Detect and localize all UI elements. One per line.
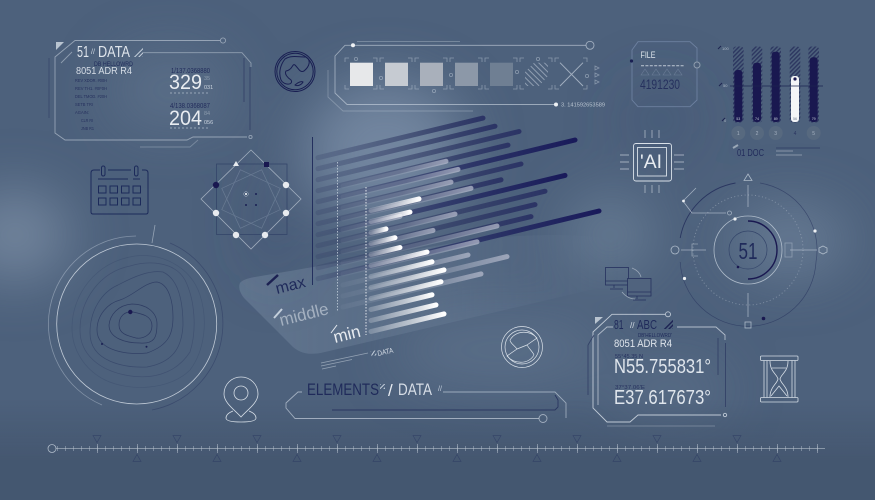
icon: AI chip: 'AI <box>640 152 662 173</box>
grey bars <box>343 161 507 307</box>
timeline markers <box>93 436 781 462</box>
corner triangle <box>595 317 603 324</box>
small list: REV TH1. #0F0H <box>75 86 107 91</box>
swatch brackets <box>345 57 599 93</box>
bar values <box>736 117 816 121</box>
bar values: 89 <box>774 117 778 121</box>
value 204: 204 <box>169 107 202 130</box>
data caption: DATA <box>377 346 394 358</box>
panel: elements data <box>286 381 566 422</box>
gradient swatches <box>350 63 583 86</box>
panel: elements data: / <box>388 381 393 400</box>
value 329: 329 <box>169 71 202 94</box>
value 204: 056 <box>204 120 213 126</box>
heading: 81 <box>614 317 624 332</box>
bar chart: vertical bars: 5 <box>812 131 815 137</box>
small list: DEL TMOD. #20H <box>75 94 107 99</box>
small list: CLR RI <box>81 118 93 123</box>
small list: AGAIN: <box>75 110 89 115</box>
panel: coordinates: DB'HELLOWRD' <box>638 333 672 339</box>
panel: coordinates: 8051 ADR R4 <box>614 338 672 350</box>
pi label: 3. 141592653589 <box>561 102 605 108</box>
file frame <box>632 42 697 107</box>
axis labels: 100 <box>722 46 729 51</box>
panel: coordinates <box>588 312 727 426</box>
coordinates frame <box>588 312 727 426</box>
panel: swatches <box>328 41 605 111</box>
longitude: 37°37.06'E <box>615 385 645 391</box>
panel: 51 data readout: // <box>91 49 95 56</box>
diamond diagram <box>201 150 301 249</box>
small list: JNB R1 <box>81 126 94 131</box>
elements heading: ELEMENTS <box>307 381 379 399</box>
bar values: 79 <box>812 117 816 121</box>
panel: coordinates: // <box>630 321 635 330</box>
bar chart: slanted bars <box>267 118 599 347</box>
fills <box>734 52 818 122</box>
panel frame lines <box>49 38 252 147</box>
platform <box>239 235 620 354</box>
bar chart: vertical bars: 1 <box>737 131 740 137</box>
bar chart: vertical bars <box>718 46 823 159</box>
doc label: 01 DOC <box>737 147 764 159</box>
corner triangle <box>56 42 64 50</box>
panel: file <box>630 42 700 107</box>
panel: coordinates: E37.617673° <box>614 387 711 409</box>
panel: 51 data readout: DB HELLOWRD <box>94 61 133 68</box>
icon: aperture <box>502 326 542 368</box>
panel: 51 data readout: DATA <box>98 44 130 61</box>
hatched tracks <box>733 46 819 122</box>
value 329: 35 <box>204 76 210 82</box>
timeline <box>48 436 825 462</box>
white bars <box>371 199 444 332</box>
panel: coordinates: ABC <box>637 317 657 332</box>
axis labels: 0 <box>724 118 727 123</box>
panel: elements data: DATA <box>398 381 432 399</box>
axis labels <box>722 46 729 123</box>
bar values: 53 <box>736 117 740 121</box>
dark bars <box>318 118 599 279</box>
icon: map pin <box>224 377 258 422</box>
icon: AI chip <box>620 130 684 193</box>
level axes <box>312 137 314 285</box>
icon: monitors <box>606 268 651 300</box>
small list <box>75 78 107 131</box>
panel: coordinates: N55.755831° <box>614 356 711 378</box>
bar chart: vertical bars: 4 <box>794 131 797 137</box>
topographic circle <box>48 225 223 410</box>
icon: hourglass <box>760 356 798 402</box>
bar values: 74 <box>755 117 759 121</box>
panel: file: 4191230 <box>640 77 680 92</box>
value 329: 1/137.0368880 <box>171 68 210 75</box>
small list: SETB TRI <box>75 102 93 107</box>
elements frame <box>286 392 566 422</box>
gauge value: 51 <box>738 238 758 264</box>
value 204: 84 <box>204 111 210 117</box>
gauge <box>671 174 827 328</box>
icon: globe <box>275 52 315 92</box>
swatch frame lines <box>328 41 594 111</box>
bar index circles <box>731 126 821 140</box>
title: 51 <box>77 44 89 61</box>
value 329: 031 <box>204 85 213 91</box>
label: max: max <box>274 274 307 298</box>
contour lines <box>72 256 204 387</box>
bar chart: vertical bars: 3 <box>774 131 777 137</box>
bar values: 56 <box>793 117 797 121</box>
value 204 <box>169 103 213 130</box>
panel: file: FILE <box>640 50 656 60</box>
bar chart: vertical bars: 2 <box>756 131 759 137</box>
icon: calendar <box>91 166 148 214</box>
axis labels: 50 <box>723 83 728 88</box>
label: min: min <box>331 322 363 347</box>
small list: REV XDOR. #00H <box>75 78 107 83</box>
panel: 51 data readout: 8051 ADR R4 <box>76 66 132 77</box>
label: middle: middle <box>277 299 331 330</box>
latitude: 55°45.35 N <box>615 354 643 360</box>
data caption <box>321 346 394 369</box>
value 204: 4/138.0368087 <box>170 103 210 110</box>
panel: 51 data readout <box>49 38 252 147</box>
panel: elements data: // <box>438 386 442 393</box>
